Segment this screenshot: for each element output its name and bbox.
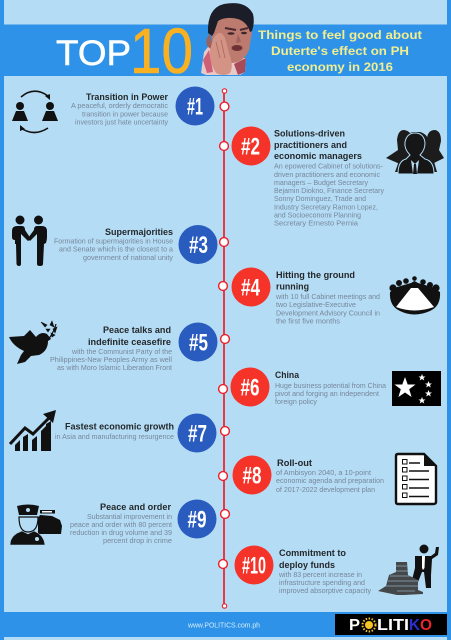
item 4: badge bbox=[232, 268, 270, 306]
item 3: icon handshake bbox=[12, 216, 47, 266]
subtitle: economy in 2016 bbox=[287, 60, 393, 74]
item 3: text: Supermajorities bbox=[105, 227, 173, 238]
item 3: badge bbox=[178, 225, 218, 264]
item 3: text: government of national unity bbox=[83, 253, 173, 262]
item 9: text: Peace and order bbox=[100, 502, 171, 513]
item 2: text: economic managers bbox=[274, 151, 362, 162]
panel: bottom strip bbox=[4, 637, 447, 640]
item 5: icon dove bbox=[9, 321, 57, 364]
item 1: text: investors just hate uncertainty bbox=[75, 118, 168, 126]
item 2: text: An epowered Cabinet of solutions- bbox=[274, 162, 384, 170]
item 1: badge bbox=[176, 86, 214, 126]
item 1: badge: #1 bbox=[187, 94, 203, 120]
item 2: text bbox=[274, 128, 384, 228]
item 2: text: practitioners and bbox=[274, 140, 347, 151]
item 5: text: Peace talks and bbox=[103, 325, 171, 336]
item 5: text bbox=[50, 325, 172, 372]
item 5: text: Philippines-New Peoples Army as well bbox=[50, 355, 172, 364]
item 8: text bbox=[276, 458, 384, 494]
item 7: icon growth chart bbox=[10, 410, 56, 451]
item 9: text: reduction in drug volume and 39 bbox=[70, 528, 172, 537]
item 10: text: Commitment to bbox=[279, 548, 346, 559]
portrait photo bbox=[201, 3, 254, 75]
item 2: badge: #2 bbox=[241, 134, 260, 160]
item 6: badge: #6 bbox=[240, 374, 260, 402]
item 5: badge: #5 bbox=[189, 330, 208, 356]
footer logo: Politiko bbox=[335, 614, 447, 635]
item 10: badge bbox=[234, 546, 274, 584]
item 10: text: infrastructure spending and bbox=[279, 578, 365, 587]
item 4: icon cabinet table bbox=[389, 276, 440, 314]
item 2: text: Secretary Ernesto Pernia bbox=[274, 218, 358, 228]
item 8: text: economic agenda and preparation bbox=[276, 476, 384, 485]
item 6: badge bbox=[230, 368, 270, 406]
footer url: www.POLITICS.com.ph bbox=[187, 620, 260, 630]
item 2: text: Sonny Dominguez, Trade and bbox=[274, 194, 366, 203]
item 1: icon transition bbox=[12, 91, 58, 132]
item 6: text: China bbox=[275, 370, 300, 381]
item 4: text bbox=[275, 270, 380, 326]
item 4: text: Hitting the ground bbox=[276, 270, 355, 281]
item 2: badge bbox=[232, 126, 270, 166]
item 2: text: and Socioeconomi Planning bbox=[274, 210, 361, 220]
item 9: text: Substantial improvement in bbox=[87, 512, 172, 521]
subtitle bbox=[258, 28, 422, 74]
item 6: text: Huge business potential from China bbox=[275, 381, 386, 390]
item 5: text: as with Moro Islamic Liberation Front bbox=[57, 363, 172, 372]
item 1: text: Transition in Power bbox=[86, 92, 168, 103]
item 2: text: Solutions-driven bbox=[274, 128, 345, 140]
item 7: text: in Asia and manufacturing resurgence bbox=[55, 432, 174, 441]
item 1: text bbox=[71, 92, 168, 126]
item 10: text: improved absorptive capacity bbox=[279, 586, 371, 595]
item 9: icon police bbox=[10, 504, 62, 545]
item 10: badge: #10 bbox=[242, 552, 266, 580]
item 2: text: managers – Budget Secretary bbox=[274, 178, 368, 187]
item 3: text: Formation of supermajorities in House bbox=[54, 236, 173, 246]
timeline bbox=[219, 89, 229, 608]
item 2: text: driven practitioners and economic bbox=[274, 170, 380, 179]
item 7: text bbox=[55, 422, 174, 441]
item 8: badge: #8 bbox=[242, 462, 262, 490]
item 5: text: indefinite ceasefire bbox=[88, 337, 171, 348]
subtitle: Things to feel good about bbox=[258, 28, 422, 42]
item 8: text: of Ambisyon 2040, a 10-point bbox=[276, 468, 371, 477]
item 2: icon managers bbox=[386, 130, 444, 174]
subtitle: Duterte's effect on PH bbox=[271, 44, 409, 58]
item 8: text: Roll-out bbox=[277, 458, 313, 469]
item 9: text bbox=[70, 502, 172, 545]
footer logo: Politiko: LITI bbox=[377, 617, 409, 634]
item 10: icon man on coins bbox=[378, 544, 439, 595]
footer logo: Politiko: P bbox=[349, 617, 360, 634]
title: TOP 10: TOP bbox=[56, 34, 131, 73]
item 10: text: with 83 percent increase in bbox=[278, 570, 362, 579]
item 9: badge bbox=[178, 500, 216, 538]
item 7: badge bbox=[178, 414, 216, 452]
item 6: text bbox=[275, 370, 386, 406]
item 10: text: deploy funds bbox=[279, 560, 335, 571]
item 4: text: running bbox=[276, 282, 309, 292]
footer logo: Politiko: O bbox=[420, 617, 432, 634]
item 1: text: A peaceful, orderly democratic bbox=[71, 101, 168, 110]
item 4: badge: #4 bbox=[241, 274, 260, 302]
item 7: text: Fastest economic growth bbox=[65, 422, 174, 432]
item 6: icon flag bbox=[392, 371, 441, 406]
item 2: text: Industry Secretary Ramon Lopez, bbox=[274, 202, 378, 212]
title: TOP 10: 10 bbox=[130, 15, 193, 87]
item 3: text bbox=[54, 227, 173, 262]
item 3: badge: #3 bbox=[189, 232, 208, 259]
title: TOP 10 bbox=[56, 15, 193, 87]
item 6: text: pivot and forging an independent bbox=[275, 389, 379, 398]
item 8: badge bbox=[232, 456, 272, 494]
item 1: text: transition in power because bbox=[82, 110, 168, 118]
item 4: text: the first five months bbox=[276, 316, 340, 326]
item 10: text bbox=[278, 548, 371, 595]
item 9: badge: #9 bbox=[188, 506, 206, 534]
footer logo: Politiko: K bbox=[409, 617, 420, 634]
item 9: text: percent drop in crime bbox=[103, 536, 172, 545]
item 4: text: Development Advisory Council in bbox=[276, 308, 380, 318]
item 8: text: of 2017-2022 development plan bbox=[276, 485, 375, 494]
item 2: text: Bejamin Diokno, Finance Secretary bbox=[274, 186, 384, 195]
item 5: text: with the Communist Party of the bbox=[71, 347, 172, 356]
item 5: badge bbox=[178, 322, 218, 362]
item 6: text: foreign policy bbox=[275, 397, 317, 406]
item 7: badge: #7 bbox=[188, 420, 207, 448]
item 3: text: and Senate which is the closest to a bbox=[59, 244, 173, 254]
item 4: text: two Legislative-Executive bbox=[276, 300, 356, 309]
item 8: icon checklist bbox=[396, 454, 436, 504]
item 9: text: peace and order with 80 percent bbox=[70, 520, 172, 529]
item 4: text: with 10 full Cabinet meetings and bbox=[275, 292, 380, 301]
panel: top strip bbox=[4, 0, 447, 24]
